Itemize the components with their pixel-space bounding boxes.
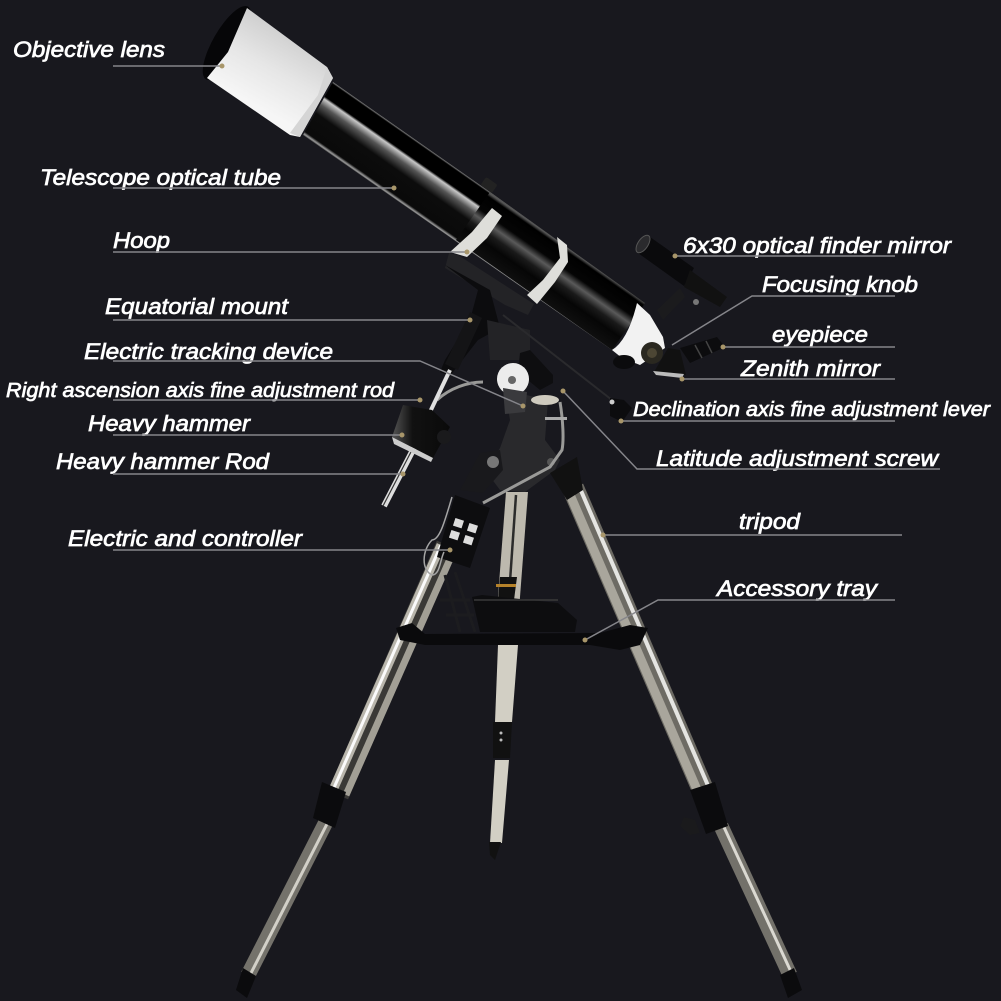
label: heavy hammer: Heavy hammer: [88, 411, 252, 436]
label: latitude adjustment screw: Latitude adjustment screw: [656, 446, 940, 471]
label: accessory tray: Accessory tray: [715, 576, 879, 601]
label: telescope optical tube: Telescope optical tube: [40, 165, 281, 190]
tripod: [236, 486, 802, 998]
mount body: [485, 390, 560, 492]
label: heavy hammer rod: [56, 449, 406, 476]
label: electric and controller: [68, 526, 452, 552]
label: telescope optical tube: [40, 165, 396, 190]
hoop rings: [450, 177, 568, 304]
label: objective lens: [13, 37, 224, 68]
heavy hammer weight: [392, 405, 451, 462]
leg braces: [498, 577, 517, 600]
focusing knob: [641, 342, 663, 364]
equatorial mount: [437, 253, 632, 503]
label: heavy hammer: [88, 411, 404, 438]
zenith mirror: [654, 348, 686, 375]
label: latitude adjustment screw: [560, 388, 940, 471]
right leg: [568, 486, 802, 998]
electric controller: [424, 495, 490, 575]
label: electric tracking device: [84, 339, 526, 408]
label: equatorial mount: [105, 294, 472, 322]
label: electric tracking device: Electric tracking device: [84, 339, 333, 364]
label: heavy hammer rod: Heavy hammer Rod: [56, 449, 270, 474]
finder scope: [633, 233, 727, 320]
label: equatorial mount: Equatorial mount: [105, 294, 289, 319]
label: tripod: tripod: [739, 509, 801, 534]
label: objective lens: Objective lens: [13, 37, 165, 62]
rear cell: [612, 303, 665, 365]
eyepiece: [680, 337, 725, 363]
label: focusing knob: [672, 272, 918, 345]
label: hoop: Hoop: [113, 228, 170, 253]
heavy hammer rod: [383, 370, 450, 506]
dew shield: [194, 0, 260, 86]
label: tripod: [600, 509, 902, 538]
white disc: [497, 363, 529, 395]
label: declination axis fine adjustment lever: Declination axis fine adjustment lever: [633, 399, 991, 421]
label: focusing knob: Focusing knob: [762, 272, 918, 297]
label: zenith mirror: [680, 356, 895, 382]
label: eyepiece: eyepiece: [772, 322, 868, 347]
label: hoop: [113, 228, 470, 254]
label: accessory tray: [582, 576, 895, 642]
label: zenith mirror: Zenith mirror: [740, 356, 882, 381]
lever: [503, 315, 612, 400]
cable: [437, 382, 563, 503]
label: optical finder mirror: 6x30 optical finder mirror: [683, 233, 953, 258]
telescope optical tube: [194, 0, 727, 378]
centre leg: [489, 492, 528, 860]
label: right ascension axis fine adjustment rod: Right ascension axis fine adjustment rod: [6, 380, 395, 402]
label: eyepiece: [720, 322, 895, 350]
left leg: [236, 545, 454, 998]
accessory tray: [396, 572, 648, 650]
label: electric and controller: Electric and controller: [68, 526, 304, 551]
